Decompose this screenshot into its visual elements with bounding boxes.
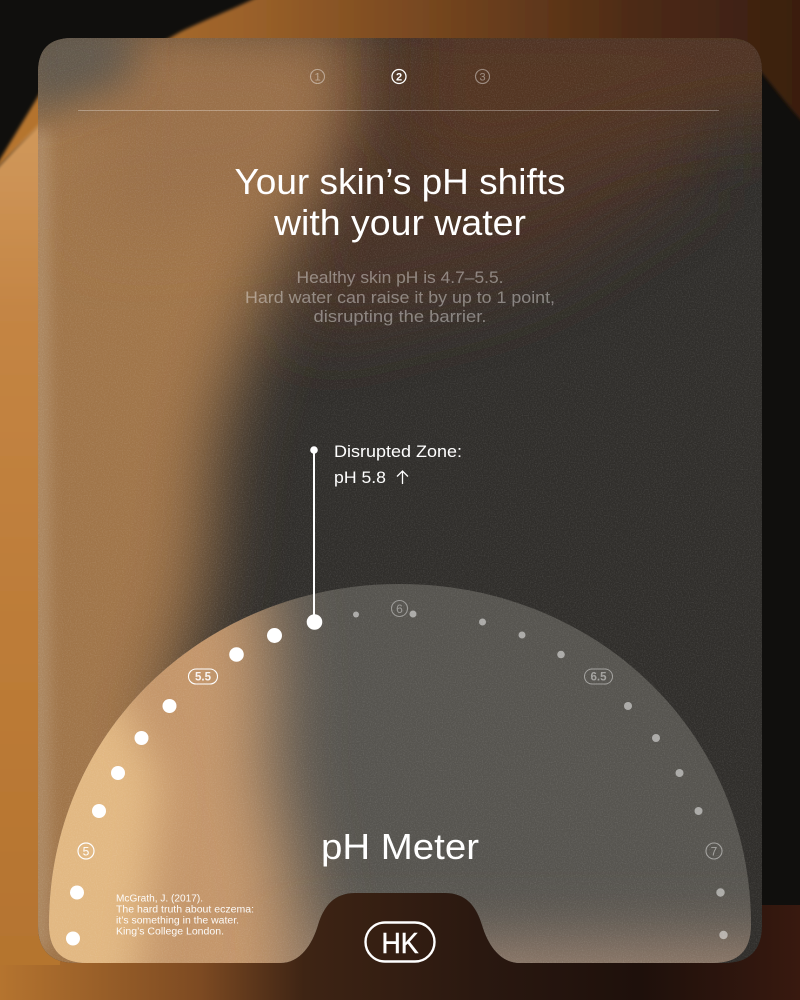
title: Your skin’s pH shifts (234, 161, 566, 202)
title: with your water (273, 202, 526, 243)
scale label 5: 5 (83, 844, 90, 858)
step 3: 3 (479, 72, 486, 84)
callout: disrupted zone (310, 443, 462, 622)
subtitle text (245, 269, 555, 326)
citation: The hard truth about eczema: (116, 904, 254, 916)
scale label 5.5 (188, 669, 218, 684)
scale label 6: 6 (396, 602, 403, 616)
title (234, 161, 566, 243)
meter label: pH Meter (321, 826, 479, 867)
scale label 6.5: 6.5 (590, 672, 607, 684)
citation: McGrath, J. (2017). (116, 894, 203, 904)
citation: it’s something in the water. (116, 916, 239, 926)
panel: pH meter semicircle (49, 584, 751, 963)
pointer line (310, 446, 318, 622)
scale label 5.5: 5.5 (195, 672, 212, 684)
callout text: Disrupted Zone: (334, 443, 462, 461)
active dots: pH 5 to 5.8 (66, 614, 322, 946)
citation: King’s College London. (116, 926, 224, 938)
scale label 5 (78, 843, 94, 859)
scale label 6.5 (584, 669, 612, 684)
subtitle text: Hard water can raise it by up to 1 point, (245, 289, 555, 307)
inactive dots: pH 5.8 to 7 (353, 610, 728, 939)
callout text (334, 443, 462, 487)
subtitle text: Healthy skin pH is 4.7–5.5. (296, 269, 504, 287)
logo: HK (366, 922, 434, 962)
citation (116, 894, 254, 938)
step 3 (476, 70, 490, 84)
icon: up arrow (397, 471, 408, 484)
callout text: pH 5.8 (334, 469, 386, 487)
scale label 7: 7 (711, 844, 718, 858)
step 2 active (392, 70, 406, 84)
step 1 (310, 70, 324, 84)
subtitle text: disrupting the barrier. (314, 308, 486, 326)
step 2 active: 2 (396, 72, 402, 84)
logo: HK: HK (382, 928, 419, 960)
step 1: 1 (314, 72, 321, 84)
scale label 7 (706, 843, 722, 859)
step indicator (310, 70, 490, 84)
scale label 6 (392, 600, 408, 616)
